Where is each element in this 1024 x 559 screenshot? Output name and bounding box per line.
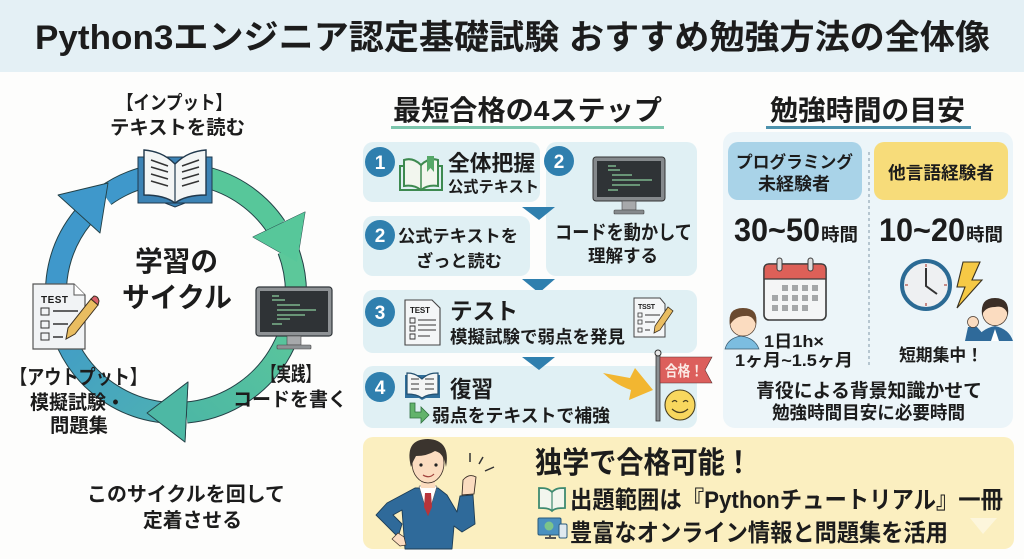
label: output — [10, 366, 147, 437]
panel: step 3 — [363, 290, 697, 353]
step badge 1 — [365, 147, 395, 177]
panel: step 3: テスト — [450, 298, 518, 324]
panel: learning cycle — [10, 92, 347, 532]
panel: step 2 code — [544, 142, 697, 276]
panel: step 1: 公式テキスト — [448, 178, 539, 196]
beginner schedule text: 1日1h× — [764, 332, 824, 351]
panel: step 2 code: 理解する — [588, 246, 658, 266]
heading: four steps: 最短合格の4ステップ — [393, 95, 662, 126]
decorative sparkle — [970, 518, 997, 534]
title: Python3エンジニア認定基礎試験 おすすめ勉強方法の全体像 — [35, 19, 990, 57]
icon: test sheet: TEST — [410, 306, 430, 315]
header: beginners: プログラミング — [736, 152, 853, 172]
step badge 2 right — [544, 146, 574, 176]
label: input: 【インプット】 — [117, 92, 232, 114]
cycle center label — [122, 246, 232, 313]
icon: calendar — [764, 258, 826, 320]
label: output: 問題集 — [50, 415, 108, 437]
label: practice: コードを書く — [233, 388, 347, 411]
study time note: 青役による背景知識かせて — [756, 379, 982, 402]
label: input: テキストを読む — [110, 117, 245, 139]
icon: smiley — [665, 390, 695, 420]
panel: self-study callout: 出題範囲は『Pythonチュートリアル』一冊 — [570, 487, 1003, 514]
panel: step 2 text — [363, 216, 530, 276]
panel: step 3: 模擬試験で弱点を発見 — [450, 327, 625, 347]
label: output: 【アウトプット】 — [10, 366, 147, 389]
icon: online devices — [538, 518, 567, 538]
icon: pass flag — [655, 350, 712, 421]
hours: experienced: 時間 — [966, 225, 1003, 245]
arrow: output to input — [56, 176, 188, 442]
icon: small test sheet: TSST — [638, 304, 656, 311]
study time note — [756, 379, 982, 423]
icon: review book — [405, 373, 440, 400]
title band — [0, 0, 1024, 72]
icon: test sheet with pencil — [33, 284, 99, 349]
icon: test sheet — [405, 300, 440, 345]
arrow: step 2 to 3 — [522, 279, 555, 293]
panel: step 2 code: コードを動かして — [555, 222, 692, 244]
icon: pass flag: 合格！ — [665, 362, 703, 380]
icon: green book — [400, 156, 442, 190]
step badge 2 — [365, 220, 395, 250]
icon: lightning bolt — [957, 262, 982, 308]
panel: study time — [723, 132, 1013, 428]
label: input — [110, 92, 245, 139]
cycle center label: サイクル — [122, 282, 232, 313]
label: practice: 【実践】 — [262, 363, 320, 386]
hours: beginners: 時間 — [821, 225, 858, 245]
icon: clock — [902, 261, 950, 309]
heading: study time: 勉強時間の目安 — [770, 95, 965, 126]
illustration: businessman — [376, 439, 476, 549]
panel: self-study callout — [363, 437, 1014, 549]
panel: step 2 text: ざっと読む — [416, 251, 502, 271]
arrow: practice to output — [147, 212, 305, 442]
header: experienced — [874, 142, 1008, 200]
panel: step 2 text: 公式テキストを — [398, 227, 518, 246]
arrow: input to practice — [205, 177, 305, 262]
study time note: 勉強時間目安に必要時間 — [772, 403, 965, 423]
panel: study time: 短期集中！ — [899, 346, 983, 365]
hours: experienced: 10~20 — [879, 212, 965, 248]
step badge 2: 2 — [375, 226, 385, 247]
label: practice — [233, 363, 347, 411]
panel: step 4: 弱点をテキストで補強 — [432, 406, 610, 426]
step badge 4 — [365, 372, 395, 402]
step badge 3 — [365, 297, 395, 327]
icon: monitor small — [593, 157, 665, 214]
panel: step 1 — [363, 142, 540, 202]
icon: green turn arrow — [410, 403, 429, 423]
cycle caption: 定着させる — [143, 509, 242, 532]
step badge 1: 1 — [375, 153, 386, 174]
header: beginners — [728, 142, 862, 200]
panel: step 1: 全体把握 — [448, 151, 535, 176]
arrow: step 3 to 4 — [522, 357, 555, 370]
arrow: orange to goal flag — [603, 368, 653, 400]
panel: self-study callout: 独学で合格可能！ — [535, 447, 752, 480]
icon: book small — [539, 488, 565, 511]
step badge 3: 3 — [375, 303, 385, 324]
icon: test sheet with pencil: TEST — [41, 295, 68, 306]
panel: step 4 — [363, 366, 697, 428]
arrow: step 1 to 2 — [522, 207, 555, 220]
header: beginners: 未経験者 — [758, 174, 830, 194]
label: output: 模擬試験・ — [30, 391, 125, 414]
icon: beginner person — [725, 308, 759, 349]
icon: small test sheet — [634, 298, 673, 337]
header: experienced: 他言語経験者 — [888, 163, 994, 183]
cycle center label: 学習の — [135, 246, 218, 277]
emphasis marks — [470, 453, 494, 471]
icon: computer monitor — [256, 287, 332, 349]
panel: step 4: 復習 — [450, 376, 493, 402]
panel: self-study callout: 豊富なオンライン情報と問題集を活用 — [570, 520, 948, 547]
beginner schedule text: 1ヶ月~1.5ヶ月 — [735, 351, 853, 370]
icon: business person — [965, 298, 1013, 341]
step badge 4: 4 — [375, 378, 386, 399]
cycle caption — [87, 483, 285, 532]
beginner schedule text — [735, 332, 853, 370]
icon: open book — [138, 150, 212, 207]
cycle caption: このサイクルを回して — [87, 483, 285, 506]
step badge 2 right: 2 — [554, 152, 564, 173]
hours: beginners: 30~50 — [734, 212, 820, 248]
